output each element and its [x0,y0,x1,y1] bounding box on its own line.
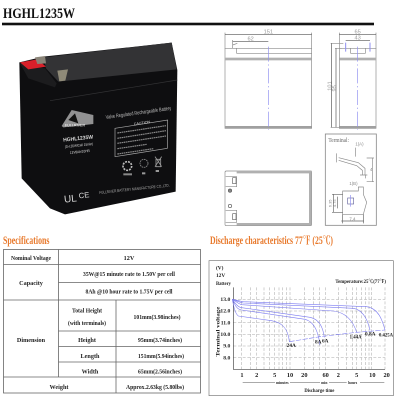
table rows: Width [82,368,99,376]
table rows: Nominal Voltage [11,255,51,262]
table rows: Length [81,353,100,360]
x axis labels: 2 [337,372,340,379]
dimension labels: 101 [328,81,334,91]
table rows: 65mm(2.56inches) [138,368,182,376]
table rows: Weight [50,384,69,391]
positive terminal cover [20,59,46,69]
battery lid top [43,43,177,82]
y axis title: Terminal voltage [215,306,221,357]
table rows: 8Ah @10 hour rate to 1.75V per cell [86,288,173,296]
table rows: 35W@15 minute rate to 1.50V per cell [83,271,175,278]
y axis labels: 9.0 [223,344,230,350]
time range labels: hours [348,381,358,385]
y axis labels: 10.0 [220,332,230,338]
label slogan: Valve Regulated Rechargeable Battery [105,106,172,121]
temperature label: Temperature:25℃(77℉) [335,278,386,285]
y axis labels: 11.0 [221,320,230,326]
drawing: terminal detail: 6.35 [327,199,332,207]
curve labels: 0.8A [365,332,376,338]
title rule [2,23,374,25]
brand logo [62,110,93,128]
dimension labels [328,29,361,91]
table rows: 12V [124,255,135,262]
specifications heading: Specifications [3,235,50,247]
x axis labels: 5 [355,372,358,379]
drawing: terminal detail: 7.4 [349,217,356,222]
curve labels: 1.44A [350,334,362,340]
x axis title: Discharge time [304,388,335,394]
battery body [19,43,177,214]
model text: (1H,35W/Cell 15min) [65,142,93,149]
time range labels [243,381,384,385]
discharge chart [209,261,393,396]
curve labels [287,332,393,349]
certification marks: UL [63,193,78,206]
table rows: Dimension [17,337,46,344]
unit labels: (V) [216,264,224,271]
curve labels: 24A [287,343,296,349]
caution box [115,120,168,157]
table rows: Approx.2.63kg (5.80lbs) [126,384,184,391]
caution box: CAUTION [134,120,151,126]
y axis labels: 8.0 [223,355,230,361]
dimension labels: 95 [332,85,338,91]
specifications table [4,250,200,393]
table rows [11,255,184,391]
time range labels: min [321,381,327,385]
unit labels [216,264,231,287]
title: HGHL1235W [3,6,75,22]
x axis labels: 20 [384,372,390,379]
x axis labels: 2 [255,372,258,379]
x axis labels: 5 [273,372,276,379]
model text [63,134,94,155]
drawing: terminal detail [325,134,376,225]
chart axes [233,287,385,369]
table rows: 95mm(3.74inches) [138,337,182,344]
dimension labels: 65 [355,29,361,35]
unit labels: Battery [216,281,231,287]
curve labels: 8A [315,340,322,346]
dimension labels: 151 [264,29,273,35]
dimension labels: 43 [355,36,361,42]
time range labels: minutes [276,381,289,385]
chart grid [233,287,385,369]
table rows: 101mm(3.98inches) [134,314,180,321]
terminal label: Terminal: [328,137,349,144]
drawing: front view [225,29,312,130]
drawing: side view [328,29,376,130]
x axis labels: 20 [301,372,307,379]
x axis labels [240,372,390,379]
table rows: (with terminals) [68,320,106,327]
model text: HGHL1235W [63,134,94,144]
drawing: terminal detail: 4.75 [332,199,337,207]
y axis labels: 12.0 [220,309,230,315]
table grid [4,250,200,393]
dimension labels: 62 [248,37,254,43]
discharge heading: Discharge characteristics 77℉ (25℃) [210,235,333,247]
table rows: Capacity [19,280,44,287]
table rows: 151mm(5.94inches) [138,353,184,360]
table rows: Total Height [72,308,103,314]
x axis labels: 10 [369,372,375,379]
x axis labels: 10 [287,372,293,379]
battery photo: CE [78,190,90,200]
battery photo [19,43,177,214]
manufacturer text: FULLRIVER BATTERY MANUFACTURE CO.,LTD. [99,183,170,195]
model text: 12V8Ah/10HR [70,149,90,155]
curve labels: 0.425A [379,332,393,338]
table rows: Height [78,337,97,344]
drawing: terminal detail: 4 [370,167,373,172]
curve labels: 6A [322,338,329,344]
x axis labels: 1 [240,372,244,379]
recycling icons [123,157,162,175]
drawing: terminal detail: 1(B) [349,181,358,186]
x axis labels: 60 [323,372,329,379]
drawing: top view [225,171,312,226]
y axis labels: 13.0 [220,297,230,303]
unit labels: 12V [216,273,225,279]
dimension labels [248,29,273,43]
y axis labels [220,297,230,361]
brand logo: FULLRIVER [65,124,85,128]
discharge curves [232,299,385,345]
drawing: terminal detail: 1(A) [355,142,364,147]
